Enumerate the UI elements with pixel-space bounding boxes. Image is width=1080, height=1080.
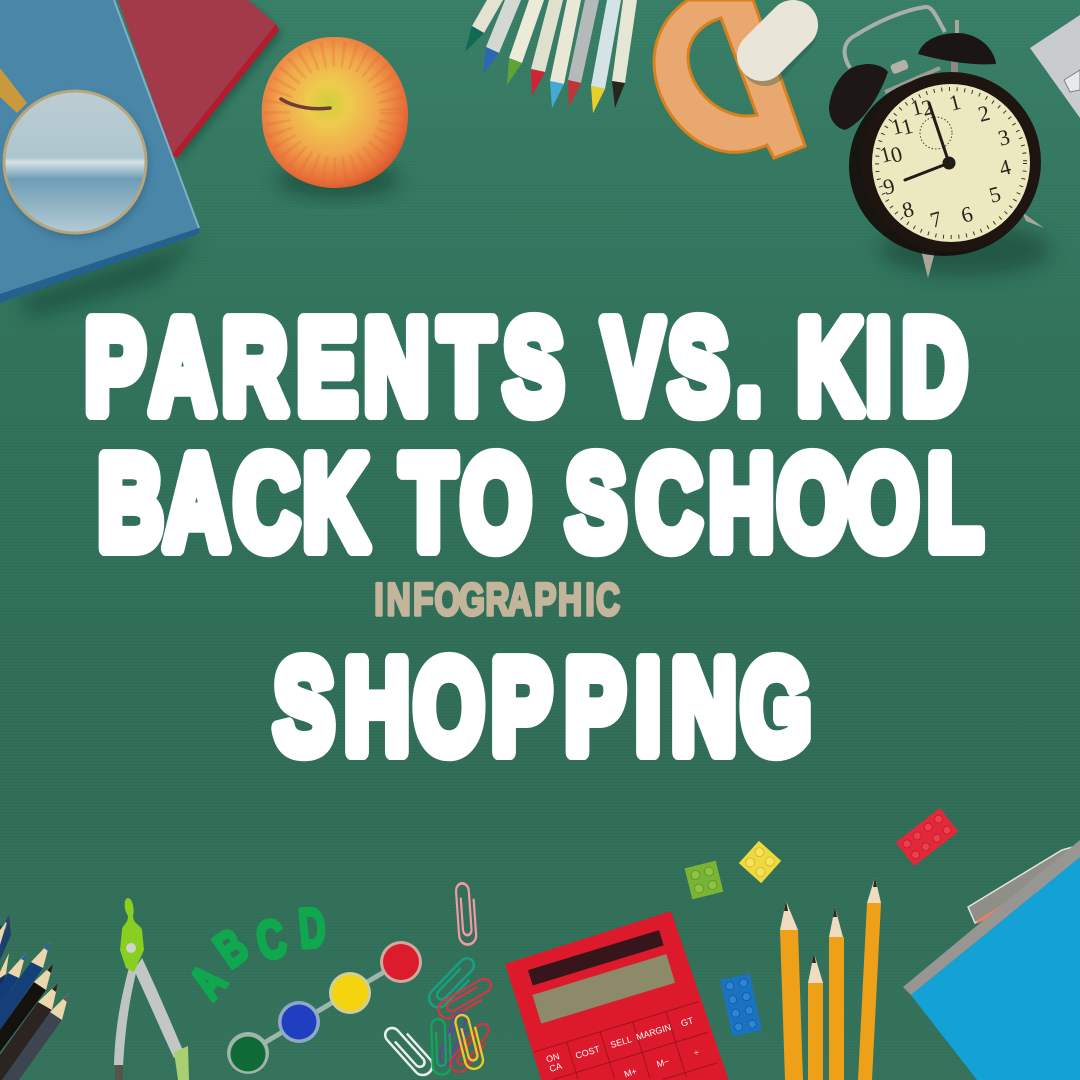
clock numerals: 7 bbox=[927, 206, 944, 233]
icon: magnifying glass bbox=[0, 68, 149, 238]
letters ABCD: A bbox=[179, 955, 236, 1008]
icon: apple bbox=[262, 37, 408, 198]
clock numerals: 6 bbox=[958, 201, 975, 228]
icon: alarm clock bbox=[829, 7, 1050, 278]
clock bar between bells bbox=[885, 68, 940, 92]
pencil: black bbox=[0, 964, 53, 1052]
clock hands bbox=[905, 103, 955, 180]
clock handle bbox=[845, 7, 945, 68]
blue book with spine bbox=[0, 0, 199, 318]
back notebook bbox=[968, 845, 1080, 923]
pencil 3 bbox=[829, 907, 844, 1080]
clock numerals: 9 bbox=[880, 173, 897, 200]
calculator body bbox=[507, 913, 727, 1080]
yellow pencils bbox=[780, 877, 881, 1080]
eraser bbox=[762, 25, 793, 62]
red pot bbox=[380, 941, 422, 983]
calculator bbox=[507, 913, 727, 1080]
pencil: dark blue short bbox=[0, 953, 9, 990]
clock dial bbox=[872, 84, 1030, 242]
key labels: GT bbox=[680, 1015, 695, 1029]
clock right bell bbox=[918, 20, 996, 76]
icon: drawing compass bbox=[114, 898, 189, 1080]
paperclips bbox=[382, 883, 496, 1079]
key labels: CA bbox=[548, 1061, 563, 1074]
title bbox=[85, 293, 982, 780]
title line 2: BACK TO SCHOOL bbox=[98, 429, 982, 576]
letters ABCD bbox=[179, 896, 328, 1008]
protractor bbox=[654, 0, 805, 158]
title line 1: PARENTS VS. KID bbox=[85, 293, 967, 440]
pencil: blue bbox=[0, 942, 50, 1030]
green pot bbox=[227, 1032, 269, 1074]
dark red crayon bbox=[568, 0, 599, 107]
blue pot bbox=[278, 1001, 320, 1043]
light blue crayon bbox=[550, 0, 581, 108]
green brick bbox=[685, 861, 723, 899]
yellow brick bbox=[739, 841, 781, 883]
blue notebooks bbox=[903, 840, 1080, 1080]
paint pots bbox=[227, 941, 422, 1074]
pencil: purple bbox=[0, 915, 11, 960]
yellow crayon bbox=[591, 0, 621, 113]
title line 3: SHOPPING bbox=[274, 633, 811, 780]
calculator keys bbox=[534, 1002, 719, 1080]
clock body bbox=[849, 76, 1039, 256]
black crayon bbox=[612, 0, 637, 108]
clock shadow bbox=[880, 224, 1050, 276]
key labels: SELL bbox=[609, 1034, 633, 1050]
green crayon bbox=[465, 0, 503, 52]
building bricks bbox=[685, 808, 958, 1036]
red book bbox=[118, 0, 282, 162]
yellow pot bbox=[329, 972, 371, 1014]
blue crayon bbox=[483, 0, 521, 74]
blue brick bbox=[720, 974, 762, 1036]
clock numerals: 5 bbox=[986, 181, 1003, 208]
clock numerals: 2 bbox=[975, 100, 992, 127]
clock feet bbox=[921, 212, 1044, 278]
crayons bbox=[465, 0, 637, 113]
front notebook bbox=[903, 840, 1080, 995]
clock numerals bbox=[877, 89, 1013, 233]
clock numerals: 1 bbox=[946, 89, 963, 116]
key labels: COST bbox=[574, 1044, 602, 1061]
key labels: MARGIN bbox=[635, 1022, 672, 1042]
clock numerals: 11 bbox=[888, 113, 916, 140]
clock numerals: 12 bbox=[908, 94, 936, 121]
key labels: ÷ bbox=[693, 1047, 700, 1058]
clock numerals: 3 bbox=[995, 124, 1012, 151]
letters ABCD: C bbox=[250, 906, 292, 972]
key labels: M+ bbox=[623, 1066, 638, 1079]
clock sub-dial bbox=[920, 117, 952, 149]
clock numerals: 8 bbox=[899, 196, 916, 223]
key labels: M− bbox=[655, 1056, 671, 1069]
pencil 1 bbox=[780, 901, 803, 1080]
key labels bbox=[545, 1010, 704, 1080]
light green crayon bbox=[507, 0, 544, 85]
clock left bell bbox=[829, 64, 888, 130]
pencil 4 bbox=[858, 877, 881, 1080]
colored pencils bundle bbox=[0, 915, 69, 1080]
infographic sublabel: INFOGRAPHIC bbox=[374, 575, 620, 625]
clock numerals: 4 bbox=[996, 154, 1013, 181]
calculator face bbox=[511, 925, 719, 1080]
pencil: navy bbox=[0, 953, 26, 1005]
solar panel bbox=[528, 930, 664, 985]
pencil 2 bbox=[808, 953, 823, 1080]
LCD display bbox=[532, 954, 675, 1024]
clock numerals: 10 bbox=[877, 141, 905, 168]
letters ABCD: B bbox=[205, 919, 258, 979]
red crayon bbox=[531, 0, 563, 96]
red brick bbox=[896, 808, 958, 866]
silver device corner bbox=[1030, 15, 1080, 118]
key labels: ON bbox=[545, 1051, 561, 1065]
pencil: gray bbox=[2, 993, 69, 1080]
letters ABCD: D bbox=[296, 896, 328, 961]
pencil: brown bbox=[0, 983, 58, 1080]
